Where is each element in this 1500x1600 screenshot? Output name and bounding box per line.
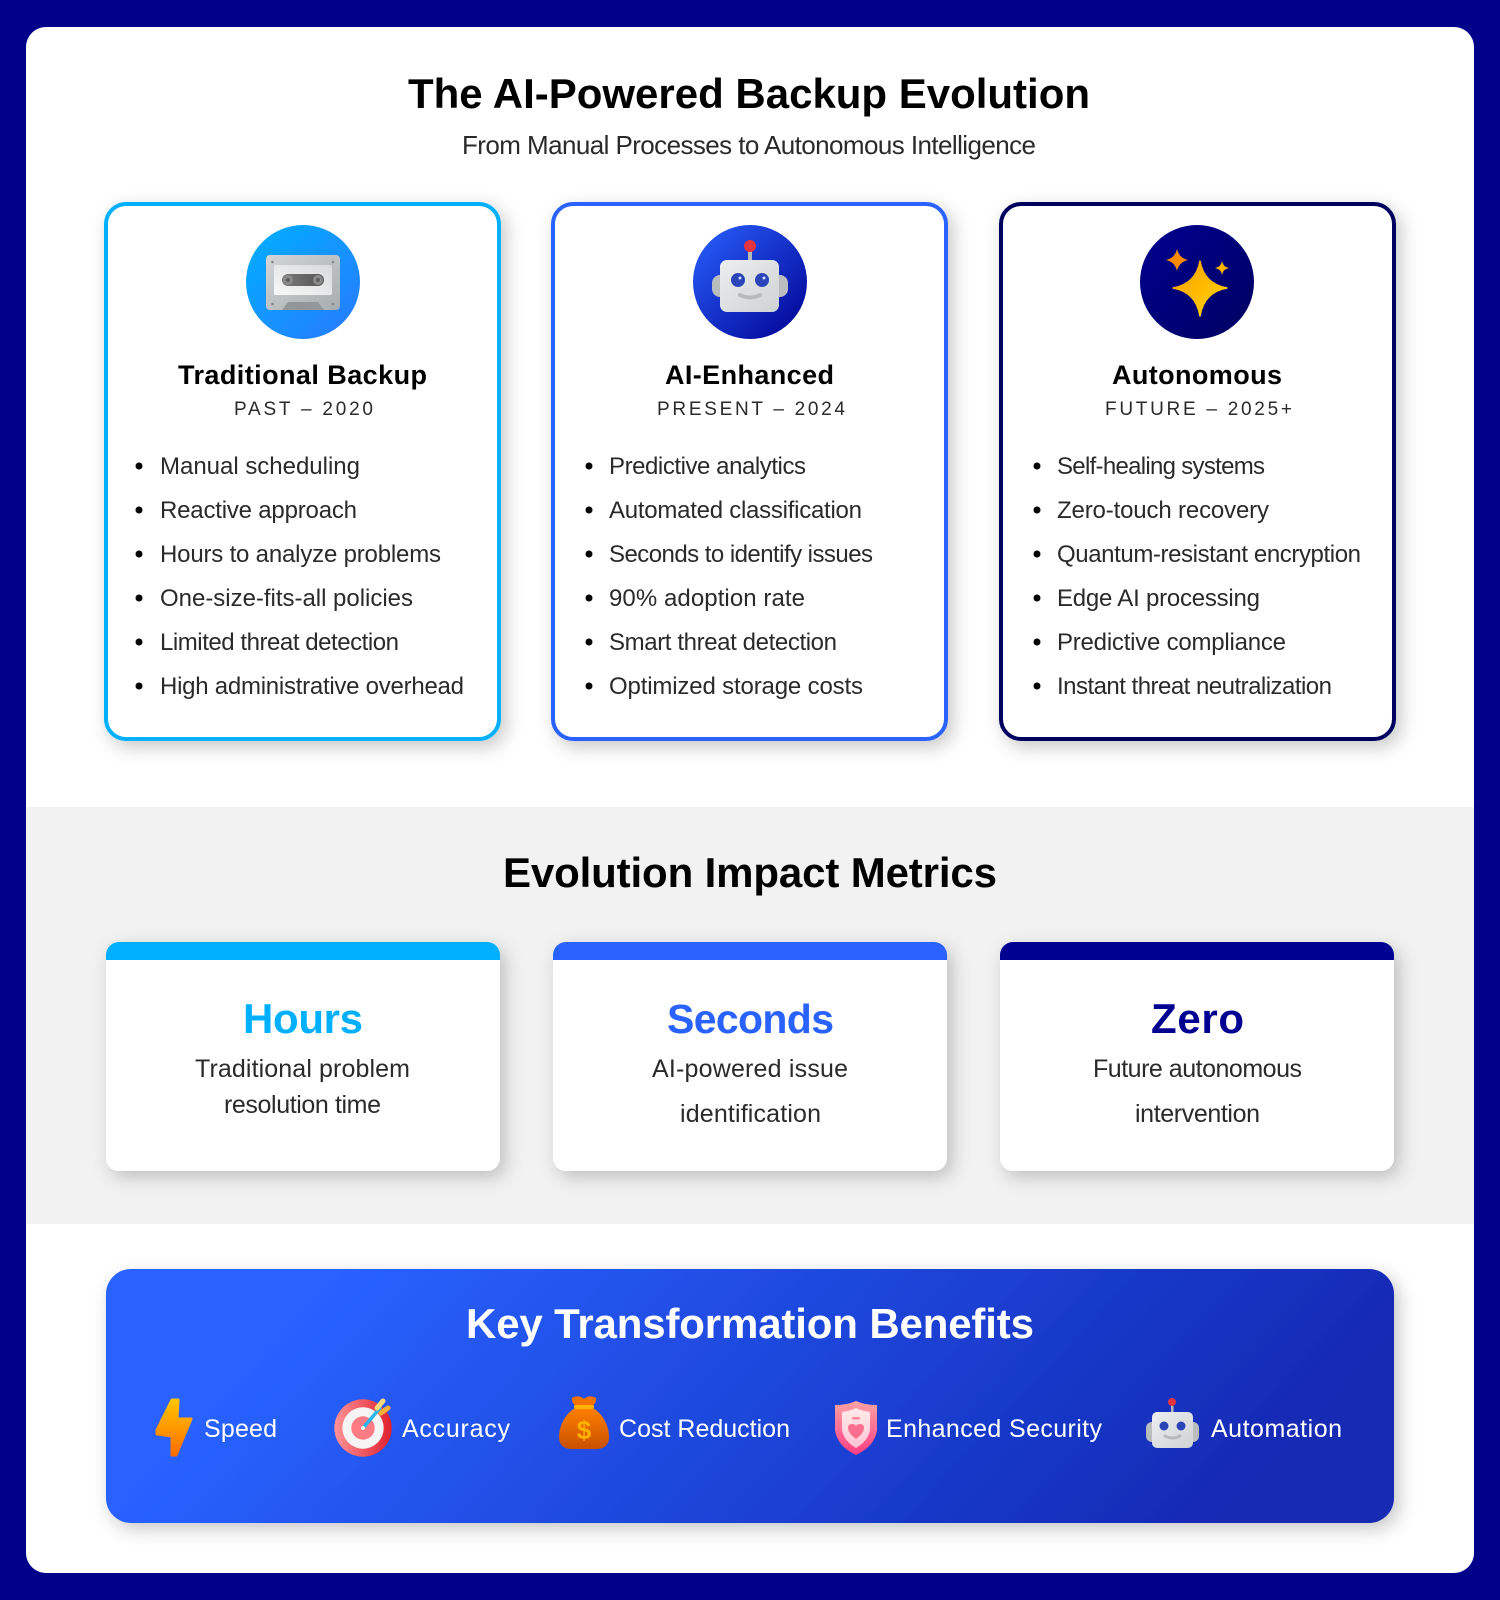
period label: PAST – 2020 (234, 399, 373, 420)
bullet list: Optimized storage costs (609, 673, 863, 700)
bullet list: Limited threat detection (160, 629, 399, 656)
metric card: Zero (1000, 942, 1394, 1171)
metric card: Seconds (553, 942, 947, 1171)
metric card: Seconds: identification (680, 1100, 821, 1128)
icon: cassette tape (246, 225, 360, 339)
card heading: AI-Enhanced (665, 360, 834, 390)
metric card: Hours: Traditional problem (195, 1055, 410, 1083)
icon: money bag: $ (577, 1415, 592, 1445)
label: Accuracy: Accuracy (402, 1415, 510, 1443)
metric card: Zero: Future autonomous (1093, 1055, 1302, 1083)
bullet list (1034, 453, 1361, 700)
panel: metrics band (26, 807, 1474, 1224)
panel: Autonomous (1001, 204, 1394, 739)
card heading: Autonomous (1112, 360, 1282, 390)
panel: key benefits (106, 1269, 1394, 1523)
bullet list (136, 453, 464, 700)
icon: lightning bolt (157, 1400, 191, 1455)
bullet list: Self-healing systems (1057, 453, 1265, 480)
bullet list: Predictive compliance (1057, 629, 1286, 656)
bullet list: Manual scheduling (160, 453, 360, 480)
icon: robot small (1146, 1398, 1199, 1448)
subtitle: From Manual Processes to Autonomous Intelligence (462, 130, 1036, 160)
bullet list: One-size-fits-all policies (160, 585, 413, 612)
metric card: Zero: Zero (1151, 995, 1244, 1042)
bullet list: Predictive analytics (609, 453, 806, 480)
bullet list: 90% adoption rate (609, 585, 805, 612)
metric card: Hours: Hours (243, 995, 363, 1042)
bullet list: Edge AI processing (1057, 585, 1260, 612)
metric card: Zero: intervention (1135, 1100, 1260, 1128)
metric card: Hours: resolution time (224, 1091, 381, 1119)
bullet list: Smart threat detection (609, 629, 837, 656)
bullet list: Seconds to identify issues (609, 541, 873, 568)
metric card: Hours (106, 942, 500, 1171)
icon: sparkles (1140, 225, 1254, 339)
icon: shield with heart (835, 1401, 877, 1455)
bullet list: High administrative overhead (160, 673, 464, 700)
icon: target with arrow (334, 1399, 392, 1457)
period label: FUTURE – 2025+ (1105, 399, 1292, 420)
metric card: Seconds: Seconds (667, 996, 834, 1042)
bullet list: Instant threat neutralization (1057, 673, 1332, 700)
label: Enhanced Security: Enhanced Security (886, 1415, 1102, 1443)
label: Cost Reduction: Cost Reduction (619, 1415, 790, 1443)
icon: robot (693, 225, 807, 339)
period label: PRESENT – 2024 (657, 399, 845, 420)
bullet list: Hours to analyze problems (160, 541, 441, 568)
bullet list: Reactive approach (160, 497, 357, 524)
card heading: Traditional Backup (178, 360, 427, 390)
metric card: Seconds: AI-powered issue (652, 1055, 848, 1083)
label: Automation: Automation (1211, 1415, 1342, 1443)
benefits heading: Key Transformation Benefits (466, 1300, 1034, 1347)
label: Speed: Speed (204, 1415, 277, 1443)
title: The AI-Powered Backup Evolution (408, 70, 1090, 117)
icon: money bag (559, 1396, 609, 1449)
panel: Traditional Backup (106, 204, 499, 739)
bullet list: Zero-touch recovery (1057, 497, 1269, 524)
metrics heading: Evolution Impact Metrics (503, 849, 997, 896)
bullet list: Automated classification (609, 497, 862, 524)
bullet list: Quantum-resistant encryption (1057, 541, 1361, 568)
bullet list (586, 453, 873, 700)
panel: AI-Enhanced (553, 204, 946, 739)
